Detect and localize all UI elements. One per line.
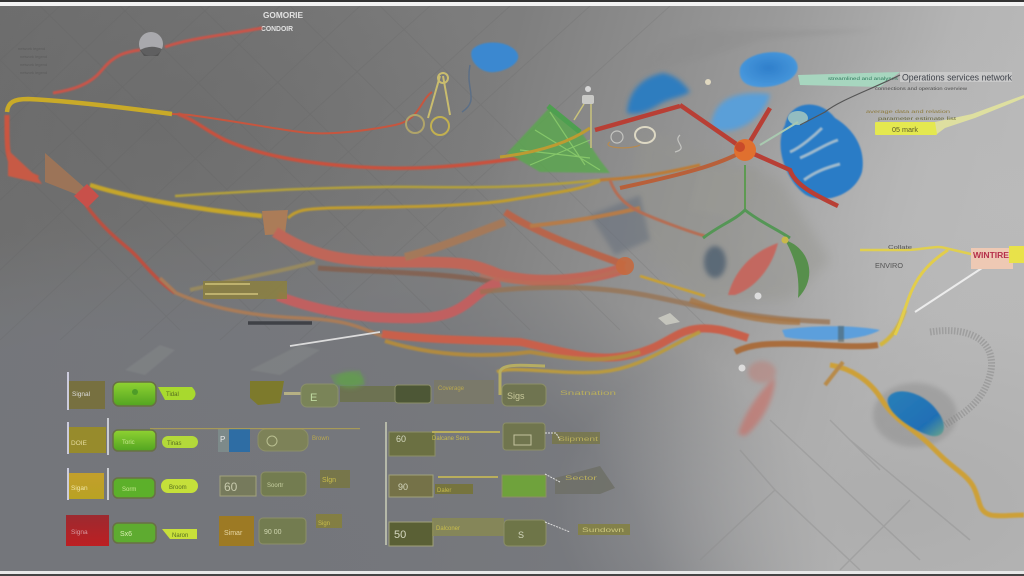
lake: top blue blob [471,42,518,72]
lake: third blue blob [740,52,798,87]
row 3 pill: Sorm [122,487,136,493]
callout: north east yellow label: parameter estimate list [878,116,958,121]
legend: column 3 cards [386,422,504,546]
card row 1 [502,384,546,406]
faint red patches [738,361,776,436]
route: red upper branch [53,28,262,93]
card row 4: S [518,530,524,540]
route: long red path to hub [7,114,520,184]
row 4 tag [162,529,197,539]
row 1 card: E [310,392,317,404]
row 2 card [150,428,360,451]
node: mid orange junction [616,257,634,275]
route: yellow outer loop [7,92,432,133]
row 1 swatch: Signal [72,391,91,398]
lake: south east blue teal blob [888,391,944,436]
title: GOMORIE [263,11,304,20]
title: CONDOIR [261,24,294,33]
row 2 pill: Toric [122,440,135,446]
legend: column 5 labels: Snatnation [560,391,616,397]
row 3 second card [261,472,306,496]
legend: column 1 swatches and pills [66,372,198,546]
row 3 sketch [320,470,350,488]
band: middle flow ribbons [160,180,878,373]
row 4 second card [259,518,306,544]
row 4 pill [113,523,156,543]
callout: north east heading: Operations services network [902,72,1012,84]
grey stippled halo [930,331,992,425]
row 3 card [220,476,256,496]
row 4 sketch: Sign [318,521,330,527]
legend: column 2 cards [150,381,360,546]
lake: second blue blob [627,73,690,114]
marker lines [248,323,380,346]
upper bracket [500,365,545,395]
faint upper left caption: network legend [20,70,47,75]
faint upper left caption: network legend [20,54,47,59]
row 2 swatch [67,418,109,455]
faint upper left caption: network legend [18,46,45,51]
east small captions [875,245,912,270]
area: green and dark lower wedges [658,210,809,372]
line label 1: Dalcane Sens [432,436,469,442]
callout: east pink label: WINTIRE [973,251,1010,260]
row 2 tag: Tinas [167,441,181,447]
faint upper legend ghosts [125,345,365,385]
legend: column 5 labels: Slipment [558,437,599,443]
node: small tower [574,86,594,148]
area: green radial spokes [500,106,610,173]
hub: red orange central node and spokes [595,105,838,210]
callout: north east heading: connections and operation overview [875,86,968,91]
row 4 amber card [219,516,254,546]
card row 1: Sigs [507,391,525,401]
row 1 swatch [67,372,105,410]
row 4 amber card: Simar [224,530,243,537]
route: yellow link to east callout [860,247,982,335]
legend: column 3 bar row 1: Coverage [438,386,465,392]
callout: east pink label [971,246,1024,269]
legend: column 4 cards [500,365,546,546]
row 3 swatch: Sigan [71,485,88,492]
east small captions: Collate [888,245,912,251]
card row 2 [503,423,545,450]
row 1 pill [113,382,156,406]
faint upper left caption: network legend [20,62,47,67]
callout: north east heading [798,72,1012,125]
card 50: 50 [394,529,406,541]
row 4 swatch [66,515,109,546]
route: orange south east trail [825,310,1024,516]
faint upper left caption [18,46,47,75]
row 4 tag: Naron [172,533,188,539]
row 1 card [250,381,338,407]
row 3 card: 60 [224,480,238,494]
row 4 second card: 90 00 [264,529,282,536]
card row 3 green [502,475,546,497]
node: grey hub top left [139,32,163,56]
callout: north east yellow label: average data and relation [866,109,951,114]
legend: column 5 labels [545,391,630,535]
title [261,11,304,33]
row 2 blue card [218,429,250,452]
row 2 swatch: DOIE [71,440,88,447]
row 3 tag [161,479,198,493]
row 3 swatch [67,468,109,500]
row 2 tag [162,436,198,448]
mid tone clutter around hub [630,130,830,300]
frame [385,422,387,545]
row 2 card: Brown [312,436,329,442]
line label 2: Daler [437,488,451,494]
callout: north east yellow label: 05 mark [892,125,918,134]
row 3 pill [113,478,155,498]
callout: north east heading: streamlined and analyses [828,76,899,81]
route: long yellow path [90,165,700,218]
row 1 tag [158,387,196,400]
lake: fourth blue blob [711,93,770,131]
east small captions: ENVIRO [875,263,904,270]
row 4 pill: Sx6 [120,531,132,538]
legend: column 3 bar row 1 [336,372,494,404]
row 4 sketch [316,514,342,528]
row 2 pill [113,430,156,451]
route: red left diagonal [86,205,175,293]
card row 4 [504,520,546,546]
legend: column 5 labels: Sector [565,476,597,482]
node: loop ornament [406,65,471,135]
row 4 swatch: Signa [71,529,88,536]
ornaments near hub [608,79,711,152]
line label 3: Dalconer [436,526,460,532]
row 3 second card: Soortr [267,483,283,489]
lake: large blue blob [781,104,863,199]
card 60: 60 [396,434,406,444]
card 90: 90 [398,482,408,492]
node: olive marker box [203,281,287,299]
callout: north east yellow label [866,95,1024,135]
row 2 blue card: P [220,435,225,444]
legend: column 5 labels: Sundown [582,528,624,534]
row 3 sketch: Slgn [322,477,336,484]
row 3 tag: Broom [169,485,187,491]
row 1 tag: Tidal [166,392,179,398]
lake: narrow blue strip [782,326,880,342]
node: left junction squares [45,153,288,235]
